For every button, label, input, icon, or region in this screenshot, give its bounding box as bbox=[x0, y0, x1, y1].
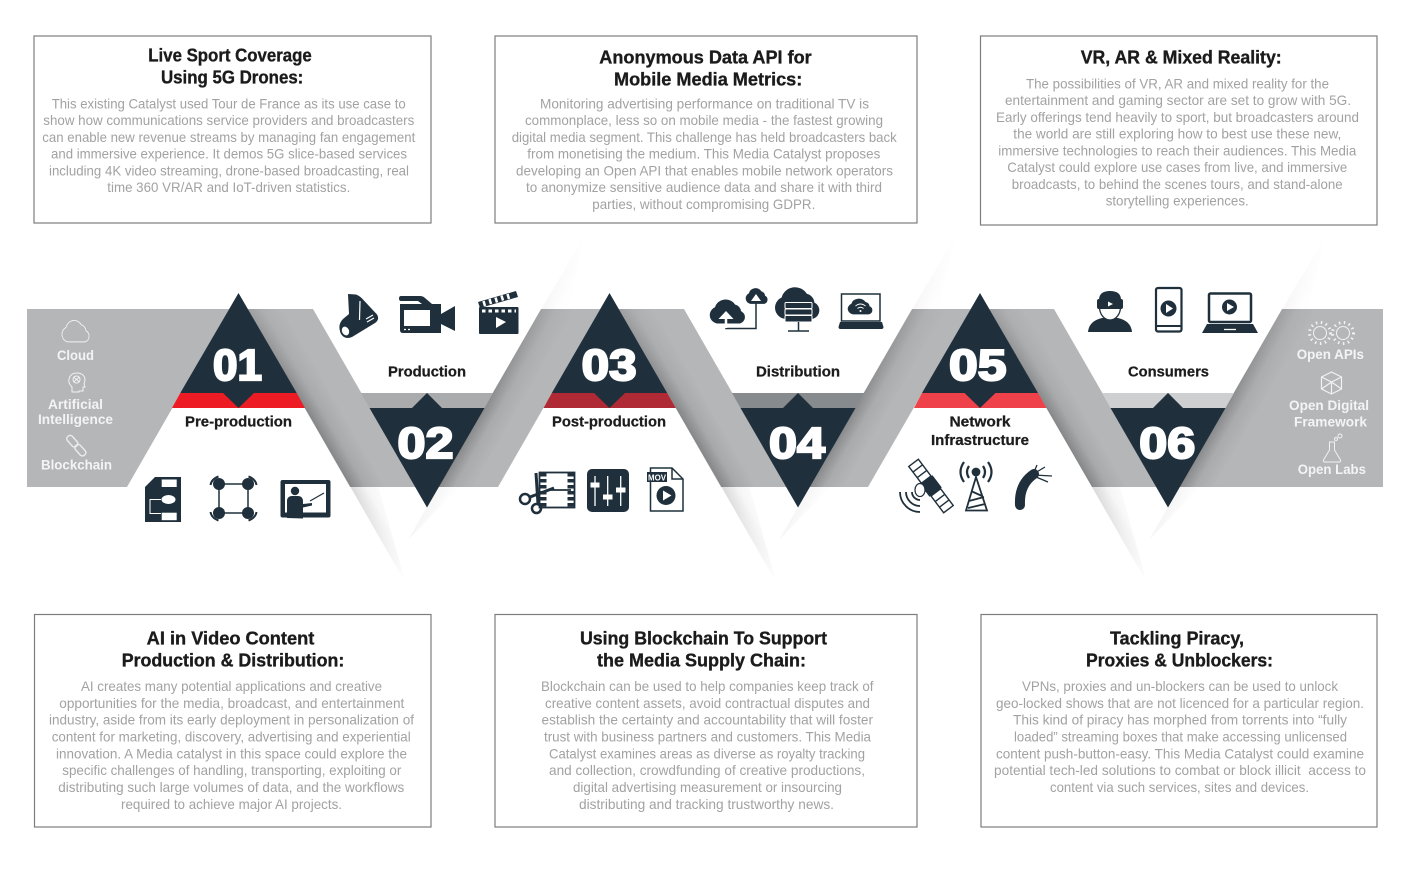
body text: content for marketing, discovery, advertising and experiential bbox=[52, 730, 411, 744]
heading: Tackling Piracy: Proxies & Unblockers: bbox=[1086, 651, 1273, 671]
icon: mixer sliders bbox=[587, 469, 629, 512]
heading: Live Sport Coverage: Using 5G Drones: bbox=[161, 68, 303, 88]
label: Post-production bbox=[552, 414, 666, 430]
step 06: Consumers bbox=[1102, 364, 1234, 508]
label: Open APIs: Open APIs bbox=[1297, 347, 1364, 362]
label: Open Labs: Open Labs bbox=[1298, 462, 1366, 477]
number 01: 01 bbox=[213, 341, 262, 390]
body text: This kind of piracy has morphed from torrents into “fully bbox=[1013, 713, 1347, 728]
body text: Early offerings tend heavily to sport, but broadcasters around bbox=[996, 110, 1359, 125]
body text: storytelling experiences. bbox=[1106, 194, 1249, 209]
label: Distribution bbox=[756, 364, 840, 380]
body text: time 360 VR/AR and IoT-driven statistics. bbox=[107, 180, 350, 195]
body text: trust with business partners and customers. This Media bbox=[544, 730, 871, 744]
heading: Blockchain: Using Blockchain To Support bbox=[580, 628, 827, 648]
body text: creative content assets, avoid contractual disputes and bbox=[545, 696, 870, 711]
icon: laptop play bbox=[1202, 294, 1258, 333]
heading: VR, AR and Mixed Reality: VR, AR & Mixed Reality: bbox=[1081, 48, 1282, 68]
body text: opportunities for the media, broadcast, and entertainment bbox=[59, 696, 405, 711]
icon: flowchart document bbox=[145, 477, 181, 522]
label: Cloud: Cloud bbox=[57, 348, 94, 363]
heading: Anonymous Data API: Mobile Media Metrics: bbox=[614, 70, 802, 90]
body text bbox=[994, 679, 1366, 795]
body text: Catalyst examines areas as diverse as royalty tracking bbox=[549, 746, 865, 761]
panel: Tackling Piracy bbox=[981, 614, 1377, 827]
heading: Blockchain: the Media Supply Chain: bbox=[597, 651, 806, 671]
label: Infrastructure bbox=[931, 433, 1029, 449]
body text: loaded” streaming boxes that make accessing unlicensed bbox=[1014, 730, 1347, 744]
label: Consumers bbox=[1128, 364, 1209, 380]
label: Artificial Intelligence bbox=[38, 397, 113, 427]
label: Open Digital Framework bbox=[1289, 398, 1369, 430]
body text bbox=[512, 96, 897, 212]
icon: MOV file: MOV bbox=[648, 472, 666, 482]
icon: radio tower bbox=[960, 462, 992, 510]
number 06: 06 bbox=[1139, 419, 1195, 468]
heading: Tackling Piracy bbox=[1086, 628, 1273, 671]
number 02: 02 bbox=[398, 419, 454, 468]
icon: MOV file bbox=[647, 468, 683, 511]
body text: industry, aside from its early deployment in personalization of bbox=[49, 713, 414, 728]
icon: AI head bbox=[69, 373, 85, 392]
body text: developing an Open API that enables mobile network operators bbox=[516, 164, 893, 178]
icon: cloud upload bbox=[710, 288, 768, 328]
body text: The possibilities of VR, AR and mixed reality for the bbox=[1026, 76, 1329, 91]
body text: Catalyst could explore use cases from live, and immersive bbox=[1007, 160, 1347, 175]
label: Production bbox=[388, 364, 466, 380]
panel: Blockchain Media Supply Chain bbox=[495, 614, 917, 827]
icon: smartphone play bbox=[1156, 288, 1182, 332]
body text: including 4K video streaming, drone-based broadcasting, real bbox=[49, 164, 409, 178]
body text: distributing and tracking trustworthy news. bbox=[579, 797, 834, 812]
icon: presenter at board bbox=[280, 480, 330, 518]
heading: Live Sport Coverage bbox=[148, 46, 312, 88]
body text: the world are still exploring how to best use these new, bbox=[1013, 127, 1341, 142]
icon: video camera bbox=[399, 296, 455, 333]
label: Open Digital Framework: Framework bbox=[1294, 414, 1367, 430]
step 03: Post-production bbox=[544, 293, 676, 430]
body text bbox=[49, 679, 414, 812]
body text: from monetising the medium. This Media Catalyst proposes bbox=[527, 147, 880, 162]
icon: blockchain bbox=[66, 434, 87, 457]
body text: Monitoring advertising performance on traditional TV is bbox=[540, 96, 869, 112]
step 02: Production bbox=[361, 364, 493, 508]
body text: can enable new revenue streams by managing fan engagement bbox=[42, 130, 416, 145]
body text: broadcasts, to behind the scenes tours, and stand-alone bbox=[1012, 177, 1343, 192]
icon: satellite bbox=[900, 459, 954, 513]
number 05: 05 bbox=[949, 341, 1006, 390]
body text bbox=[541, 679, 874, 812]
heading: Live Sport Coverage: Live Sport Coverage bbox=[148, 46, 312, 66]
panel: VR, AR and Mixed Reality bbox=[980, 36, 1377, 225]
heading: AI in Video Content bbox=[122, 628, 344, 671]
icon: laptop with cloud wifi bbox=[838, 294, 884, 329]
heading: AI in Video Content: Production & Distribution: bbox=[122, 651, 344, 671]
label: Open Digital Framework: Open Digital bbox=[1289, 398, 1369, 413]
heading: Anonymous Data API: Anonymous Data API for bbox=[599, 48, 812, 68]
body text: specific challenges of handling, transporting, exploiting or bbox=[62, 763, 402, 778]
number 03: 03 bbox=[582, 341, 637, 390]
body text: digital media segment. This challenge has held broadcasters back bbox=[512, 130, 897, 145]
panel: Anonymous Data API bbox=[495, 36, 917, 223]
body text: and immersive experience. It demos 5G slice-based services bbox=[51, 147, 407, 162]
grey zigzag band bbox=[27, 293, 1383, 507]
icon: post-production film and scissors bbox=[520, 472, 574, 513]
left column: enablers bbox=[38, 320, 113, 472]
body text: entertainment and gaming sector are set to grow with 5G. bbox=[1005, 93, 1351, 108]
right column: open resources bbox=[1289, 322, 1369, 477]
panel: AI in Video Content bbox=[34, 614, 431, 827]
body text: immersive technologies to reach their audiences. This Media bbox=[998, 143, 1357, 158]
icon: clapperboard bbox=[478, 291, 518, 334]
body text: commonplace, less so on mobile media - the fastest growing bbox=[525, 113, 883, 128]
label: Network bbox=[950, 414, 1011, 430]
icon: meeting table bbox=[210, 476, 256, 520]
body text: content push-button-easy. This Media Catalyst could examine bbox=[996, 746, 1364, 761]
body text: potential tech-led solutions to combat or block illicit access to bbox=[994, 763, 1366, 778]
panel: Live Sport Coverage bbox=[34, 36, 431, 223]
body text: content via such services, sites and devices. bbox=[1050, 780, 1309, 795]
body text: and collection, crowdfunding of creative productions, bbox=[549, 763, 865, 778]
icon: fibre optic cable bbox=[1020, 465, 1052, 505]
icon: open APIs bbox=[1310, 322, 1354, 344]
body text: distributing such large volumes of data, and the workflows bbox=[58, 780, 404, 795]
step 04: Distribution bbox=[732, 364, 864, 508]
label bbox=[931, 414, 1029, 449]
body text: innovation. A Media catalyst in this space could explore the bbox=[56, 746, 407, 761]
icon: open digital framework cube bbox=[1322, 372, 1342, 394]
body text: required to achieve major AI projects. bbox=[121, 797, 342, 812]
label: Artificial Intelligence: Artificial bbox=[48, 397, 103, 412]
body text: digital advertising measurement or insourcing bbox=[573, 780, 842, 795]
icon: cloud bbox=[62, 320, 89, 342]
body text bbox=[42, 96, 416, 195]
body text: geo-locked shows that are not licenced for a particular region. bbox=[996, 696, 1364, 711]
heading: AI in Video Content: AI in Video Content bbox=[147, 628, 314, 648]
step 05: Network Infrastructure bbox=[914, 293, 1046, 449]
label: Artificial Intelligence: Intelligence bbox=[38, 412, 113, 427]
icon: VR viewer bbox=[1088, 291, 1132, 332]
heading: Tackling Piracy: Tackling Piracy, bbox=[1110, 628, 1244, 648]
label: Pre-production bbox=[185, 414, 292, 430]
step 01: Pre-production bbox=[172, 293, 305, 430]
icon: music spotlight bbox=[339, 294, 378, 338]
number 04: 04 bbox=[769, 419, 826, 468]
heading: Blockchain bbox=[580, 628, 827, 671]
body text: establish the certainty and accountability that will foster bbox=[542, 713, 873, 728]
body text bbox=[996, 76, 1359, 209]
heading: Anonymous Data API bbox=[599, 48, 812, 90]
body text: show how communications service providers and broadcasters bbox=[43, 113, 414, 128]
body text: This existing Catalyst used Tour de France as its use case to bbox=[52, 96, 406, 112]
body text: Blockchain can be used to help companies keep track of bbox=[541, 679, 874, 694]
body text: VPNs, proxies and un-blockers can be used to unlock bbox=[1022, 679, 1338, 694]
label: Blockchain: Blockchain bbox=[41, 458, 112, 472]
body text: to anonymize sensitive audience data and share it with third bbox=[526, 180, 882, 195]
body text: AI creates many potential applications and creative bbox=[81, 679, 382, 694]
icon: open labs flask bbox=[1323, 434, 1342, 462]
icon: cloud server bbox=[775, 287, 819, 331]
body text: parties, without compromising GDPR. bbox=[592, 197, 815, 212]
